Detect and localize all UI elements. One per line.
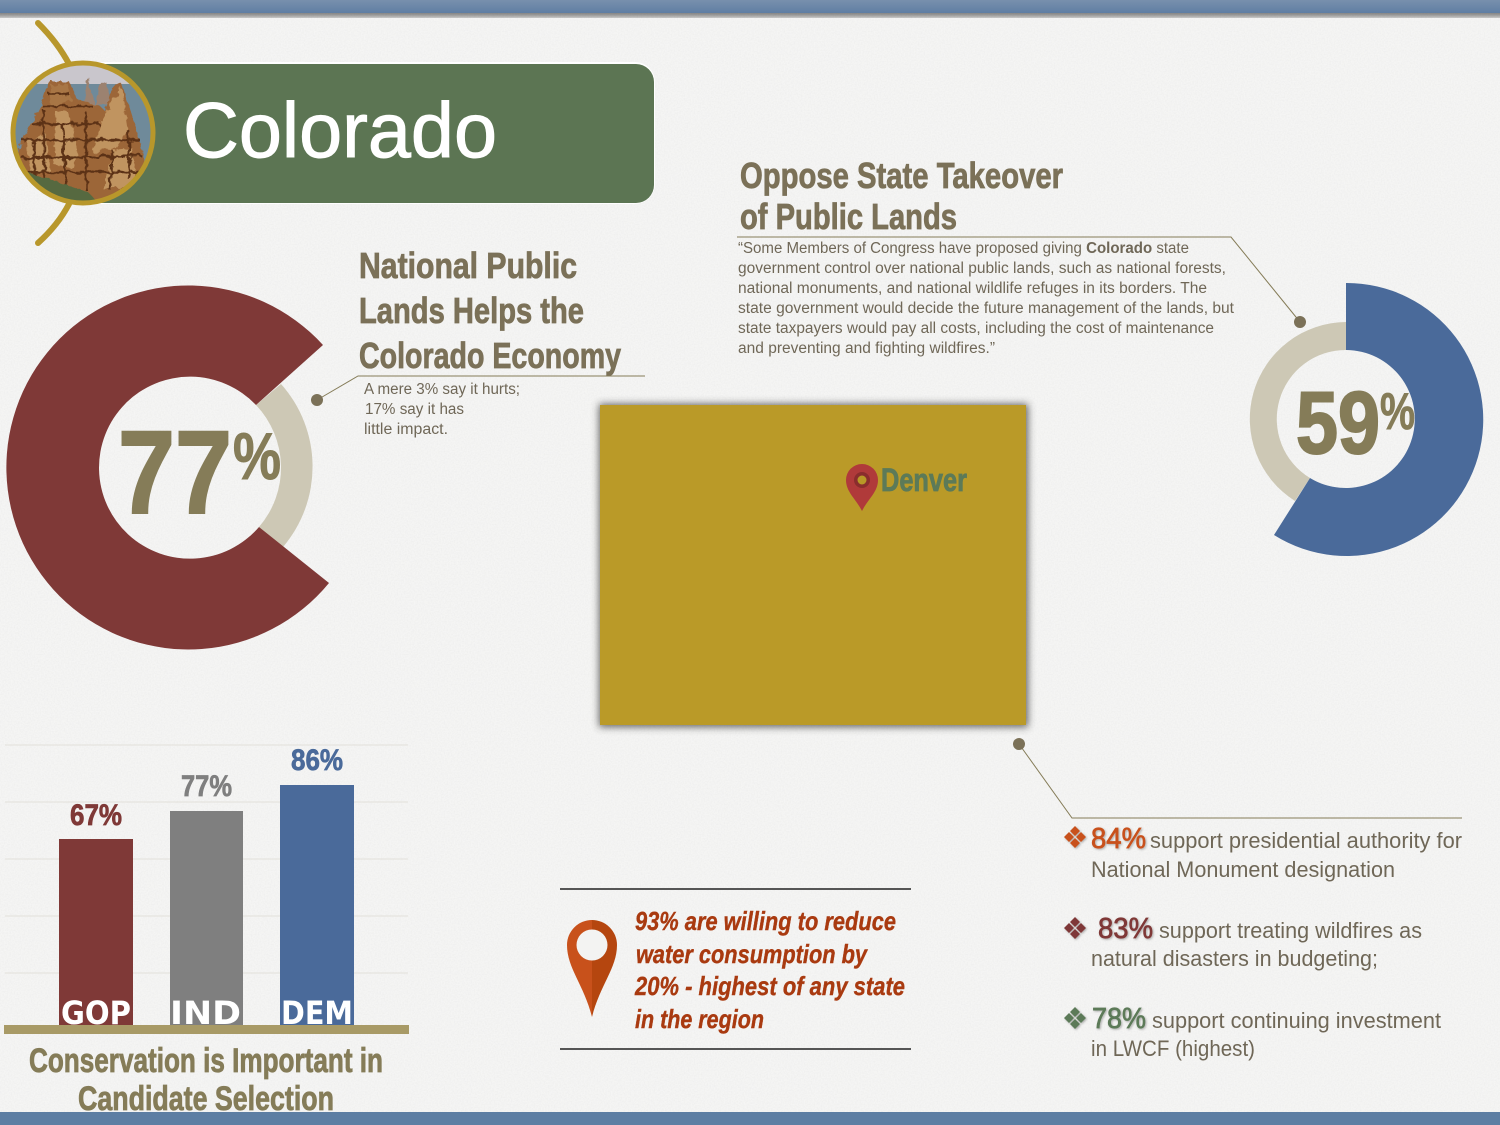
note text: 17% say it has <box>365 401 464 418</box>
top band <box>0 0 1500 17</box>
quote text: “Some Members of Congress have proposed giving Colorado state <box>738 240 1189 257</box>
bar DEM: 86% <box>291 744 343 777</box>
bar DEM: DEM <box>281 994 353 1032</box>
note text <box>364 381 520 438</box>
stat 84% <box>1064 823 1462 882</box>
callout text <box>634 906 905 1034</box>
heading: Lands Helps the <box>359 290 584 331</box>
stat 84%: support presidential authority for <box>1150 828 1462 853</box>
note text: little impact. <box>364 421 448 438</box>
title: Colorado <box>183 86 497 174</box>
callout text: water consumption by <box>636 939 868 969</box>
Denver label: Denver <box>881 462 967 498</box>
quote text <box>738 240 1235 357</box>
heading: of Public Lands <box>740 196 957 237</box>
stat 83%: 83% <box>1098 913 1153 945</box>
callout: water consumption <box>560 889 911 1049</box>
bar chart: conservation importance <box>4 744 409 1118</box>
quote text: state government would decide the future management of the lands, but <box>738 300 1235 317</box>
gold arc <box>38 23 69 243</box>
quote text: government control over national public lands, such as national forests, <box>738 260 1226 277</box>
circular photo of rock formations <box>10 60 160 210</box>
bar DEM <box>280 744 354 1032</box>
value: 59 <box>1296 373 1380 472</box>
stat 78%: support continuing investment <box>1152 1008 1441 1033</box>
stat 84%: 84% <box>1091 823 1146 855</box>
heading: National Public <box>359 245 577 286</box>
donut chart 77% <box>6 285 329 649</box>
bar IND <box>170 770 243 1032</box>
heading <box>359 245 621 376</box>
value: 77 <box>118 407 232 539</box>
bottom band <box>0 1112 1500 1125</box>
icon: orange map pin <box>567 920 617 1017</box>
chart caption <box>29 1042 383 1118</box>
panel: support statistics <box>1013 738 1462 1061</box>
stat 78% <box>1064 1003 1441 1061</box>
axis baseline <box>4 1025 409 1034</box>
panel: national public lands economy <box>6 245 645 649</box>
quote text: and preventing and fighting wildfires.” <box>738 340 995 357</box>
green title bar <box>60 62 655 204</box>
chart caption: Candidate Selection <box>78 1080 334 1118</box>
callout text: 93% are willing to reduce <box>635 906 896 936</box>
stat 83%: support treating wildfires as <box>1159 918 1422 943</box>
connector line <box>737 237 1306 328</box>
donut chart 59% <box>1250 283 1483 556</box>
value: % <box>1380 383 1415 441</box>
icon: Denver map pin <box>846 464 878 511</box>
heading <box>740 155 1063 237</box>
stat 83% <box>1064 913 1422 971</box>
stat 83%: natural disasters in budgeting; <box>1091 946 1378 971</box>
panel: oppose state takeover <box>737 155 1483 556</box>
heading: Oppose State Takeover <box>740 155 1063 196</box>
Colorado state map <box>599 404 1028 727</box>
bar GOP: 67% <box>70 799 122 832</box>
grid lines <box>5 745 408 973</box>
stat 78%: in LWCF (highest) <box>1091 1036 1255 1061</box>
connector line <box>311 376 645 406</box>
stat 78%: 78% <box>1092 1003 1146 1035</box>
callout text: 20% - highest of any state <box>634 971 905 1001</box>
callout text: in the region <box>635 1004 764 1034</box>
chart caption: Conservation is Important in <box>29 1042 383 1080</box>
bar GOP <box>59 799 133 1032</box>
quote text: state taxpayers would pay all costs, including the cost of maintenance <box>738 320 1214 337</box>
stat 84%: National Monument designation <box>1091 857 1395 882</box>
heading: Colorado Economy <box>359 335 621 376</box>
note text: A mere 3% say it hurts; <box>364 381 520 398</box>
header banner <box>10 23 655 243</box>
bar GOP: GOP <box>61 994 131 1032</box>
bar IND: IND <box>170 994 241 1032</box>
connector line <box>1013 738 1462 818</box>
value: % <box>233 419 281 493</box>
bar IND: 77% <box>181 770 232 803</box>
quote text: national monuments, and national wildlife refuges in its borders. The <box>738 280 1207 297</box>
